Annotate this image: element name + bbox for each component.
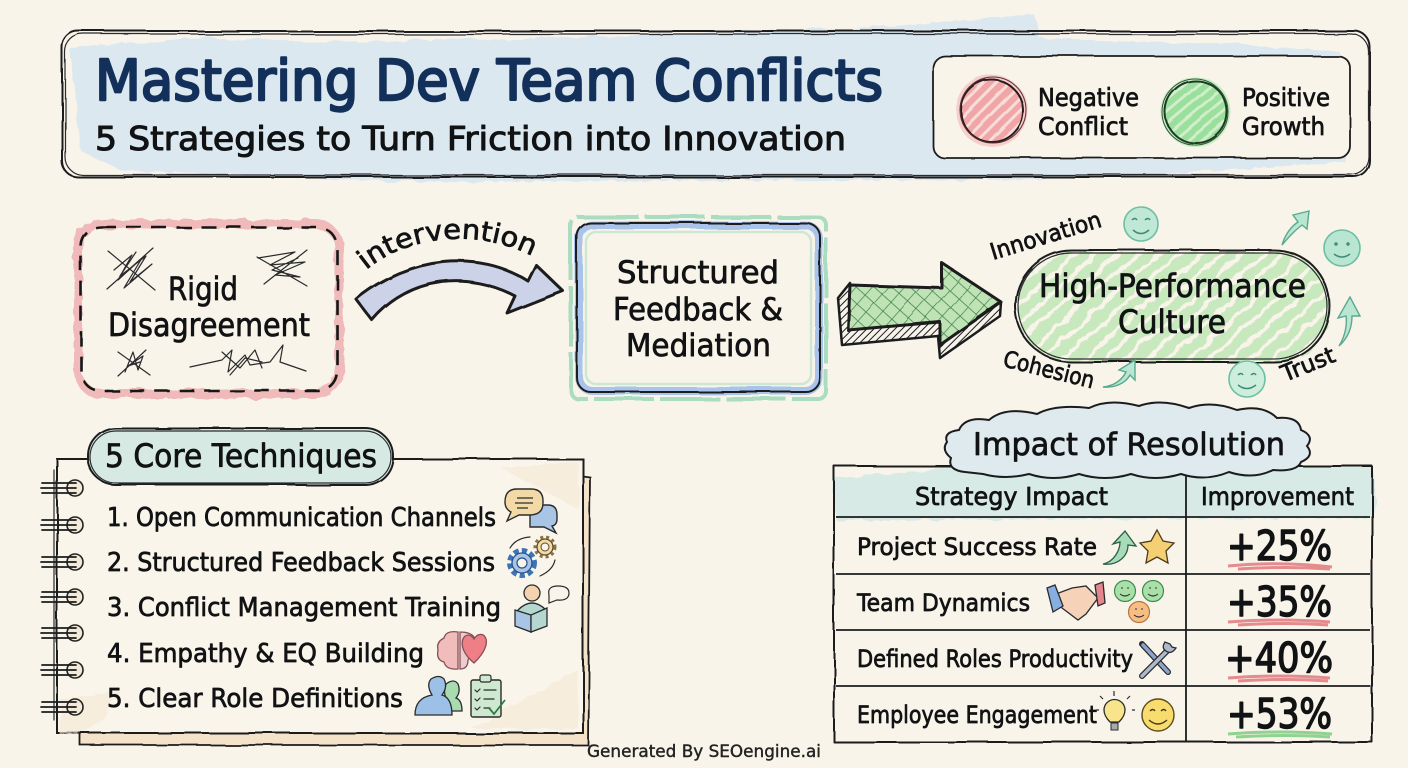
icon: clipboard checklist — [471, 675, 505, 717]
table header text: Strategy Impact — [915, 482, 1108, 511]
icon: growth arrow bottom — [1103, 360, 1135, 387]
scribbles — [107, 248, 307, 376]
table header text: Improvement — [1201, 482, 1354, 511]
panel: structured feedback and mediation — [571, 217, 826, 399]
row: project success rate — [857, 522, 1332, 570]
legend: positive growth: Growth — [1242, 112, 1325, 141]
label: rigid disagreement: Disagreement — [108, 306, 310, 344]
list item 2 — [107, 537, 555, 578]
title: Mastering Dev Team Conflicts — [95, 49, 883, 114]
list item 3: 3. Conflict Management Training — [107, 593, 501, 623]
icon: person reading — [515, 585, 569, 632]
heading: 5 core techniques — [88, 428, 393, 485]
icon: light bulb — [1096, 691, 1135, 730]
icon: smiley top — [1124, 207, 1158, 241]
panel: rigid disagreement — [78, 224, 339, 394]
icon: brain and heart — [438, 632, 486, 669]
value: +53%: +53% — [1227, 690, 1332, 738]
label: rigid disagreement: Rigid — [168, 270, 238, 308]
list item 1 — [107, 489, 557, 533]
label: innovation: Innovation — [987, 207, 1105, 266]
icon: smiley right — [1324, 230, 1360, 266]
icon: yellow smiley — [1142, 699, 1174, 731]
legend: negative conflict: Negative — [1038, 83, 1139, 112]
panel: 5 core techniques notebook — [41, 428, 590, 745]
label: cohesion: Cohesion — [1001, 347, 1097, 394]
legend: negative conflict — [956, 75, 1139, 147]
icon: star — [1140, 530, 1174, 563]
row: employee engagement — [857, 690, 1332, 738]
label: intervention: intervention — [355, 221, 535, 269]
table header wash — [832, 466, 1378, 520]
row: team dynamics — [856, 578, 1332, 626]
legend: positive growth — [1161, 77, 1330, 147]
heading cloud: impact of resolution — [945, 402, 1310, 478]
label: structured feedback and mediation — [613, 255, 783, 364]
row: employee engagement: Employee Engagement — [857, 701, 1097, 729]
heading cloud: impact of resolution: Impact of Resolution — [973, 427, 1285, 463]
icon: growth arrow right — [1338, 297, 1360, 346]
row: defined roles productivity: Defined Roles Productivity — [857, 645, 1133, 673]
arrow: hatched green arrow — [838, 263, 1001, 358]
label: structured feedback and mediation: Structured — [617, 255, 779, 291]
value: +25%: +25% — [1227, 522, 1332, 570]
table header text — [915, 482, 1354, 511]
row: project success rate: Project Success Rate — [857, 533, 1097, 561]
panel: high-performance culture — [987, 207, 1360, 397]
arrow: intervention — [354, 221, 564, 322]
legend — [933, 56, 1350, 158]
heading: 5 core techniques: 5 Core Techniques — [105, 437, 377, 475]
list item 5 — [107, 675, 505, 717]
value: +40%: +40% — [1225, 634, 1333, 682]
panel: impact of resolution table — [832, 402, 1378, 742]
icon: tools — [1142, 642, 1176, 676]
label: trust: Trust — [1277, 342, 1339, 388]
list item 1: 1. Open Communication Channels — [107, 503, 496, 533]
icon: chat bubbles — [505, 489, 557, 533]
list item 3 — [107, 585, 569, 632]
icon: handshake — [1047, 582, 1105, 620]
label: structured feedback and mediation: Mediation — [626, 328, 771, 364]
panel: header banner — [62, 14, 1370, 182]
list item 2: 2. Structured Feedback Sessions — [107, 548, 495, 578]
icon: gears — [510, 537, 555, 576]
icon: three smileys — [1114, 580, 1164, 622]
icon: up arrow — [1103, 531, 1136, 564]
label: high-performance culture: Culture — [1118, 303, 1226, 341]
row: team dynamics: Team Dynamics — [856, 589, 1030, 617]
subtitle: 5 Strategies to Turn Friction into Innovation — [95, 119, 846, 158]
footer credit: Generated By SEOengine.ai — [587, 742, 821, 762]
notebook rings — [41, 480, 83, 715]
list item 5: 5. Clear Role Definitions — [107, 684, 403, 714]
value: +35%: +35% — [1227, 578, 1332, 626]
list item 4: 4. Empathy & EQ Building — [107, 639, 424, 669]
icon: two people — [415, 676, 462, 715]
label: structured feedback and mediation: Feedback & — [613, 292, 783, 328]
label: high-performance culture — [1039, 267, 1306, 341]
label: high-performance culture: High-Performance — [1039, 267, 1306, 305]
legend: negative conflict: Conflict — [1038, 112, 1128, 141]
icon: growth arrow top right — [1282, 211, 1309, 245]
row: defined roles productivity — [857, 634, 1333, 682]
icon: smiley bottom — [1229, 361, 1265, 397]
legend: positive growth: Positive — [1242, 83, 1330, 112]
label: rigid disagreement — [108, 270, 310, 344]
